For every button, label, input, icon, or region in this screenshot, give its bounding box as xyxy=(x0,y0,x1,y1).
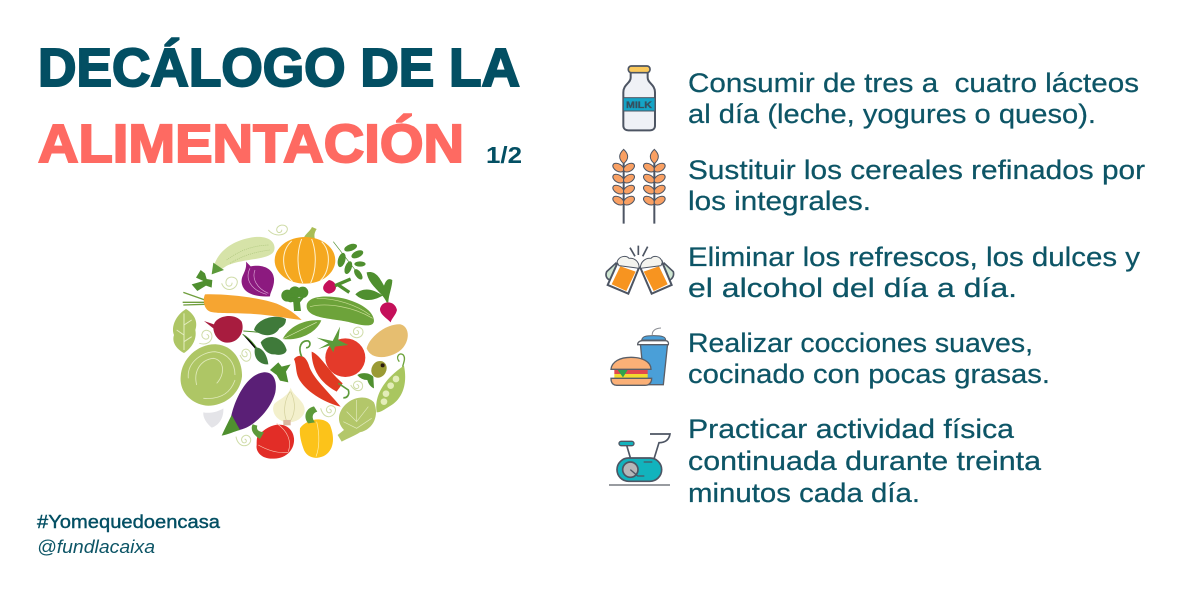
icon: burger and drink xyxy=(611,328,668,385)
cabbage xyxy=(181,344,242,406)
milk label: MILK xyxy=(626,100,652,110)
parsley left xyxy=(192,270,212,291)
radish sprig xyxy=(323,279,351,294)
radish right xyxy=(355,272,397,322)
zucchini xyxy=(212,237,275,274)
icon: beer mugs xyxy=(606,246,674,294)
text: cereals xyxy=(688,155,1145,216)
icon: milk bottle xyxy=(623,66,655,130)
potato xyxy=(367,324,408,357)
text: soft drinks xyxy=(688,242,1141,303)
text: exercise: continuada durante treinta xyxy=(688,446,1042,476)
title xyxy=(38,38,520,174)
title: DECÁLOGO DE LA xyxy=(38,38,520,98)
text: soft drinks: el alcohol del día a día. xyxy=(688,273,1017,303)
parsley centre xyxy=(270,362,291,382)
artichoke xyxy=(338,398,376,442)
text: soft drinks: Eliminar los refrescos, los dulces y xyxy=(688,242,1141,272)
text: dairy xyxy=(688,68,1139,129)
garlic bulb xyxy=(273,388,305,425)
pumpkin xyxy=(275,227,335,284)
text: cereals: Sustituir los cereales refinados por xyxy=(688,155,1145,185)
text: cooking: cocinado con pocas grasas. xyxy=(688,359,1050,389)
text: cereals: los integrales. xyxy=(688,186,871,216)
olive xyxy=(357,358,390,388)
handle: @fundlacaixa xyxy=(37,537,155,557)
beetroot xyxy=(204,316,287,364)
herb top right xyxy=(333,242,366,281)
cucumber xyxy=(307,296,374,325)
text: exercise: Practicar actividad física xyxy=(688,414,1015,444)
title: ALIMENTACIÓN xyxy=(38,114,464,174)
yellow pepper xyxy=(300,406,333,458)
eggplant xyxy=(222,372,276,436)
text: cooking xyxy=(688,328,1050,389)
tomato xyxy=(317,327,365,377)
hashtag: #Yomequedoencasa xyxy=(37,511,221,532)
lettuce leaf xyxy=(173,309,196,353)
text: exercise: minutos cada día. xyxy=(688,478,920,508)
illustration: circle of vegetables xyxy=(173,225,408,459)
page number: 1/2 xyxy=(486,142,522,168)
text: dairy: Consumir de tres a cuatro lácteos xyxy=(688,68,1139,98)
swirls xyxy=(199,225,363,446)
icon: wheat xyxy=(611,149,667,224)
text: exercise xyxy=(688,414,1042,508)
broccoli xyxy=(281,286,308,311)
icon: exercise bike xyxy=(609,434,670,485)
text: cooking: Realizar cocciones suaves, xyxy=(688,328,1033,358)
red pepper xyxy=(252,423,294,459)
garlic clove xyxy=(203,408,223,428)
text: dairy: al día (leche, yogures o queso). xyxy=(688,99,1096,129)
pea pod xyxy=(376,354,405,412)
spinach leaf xyxy=(283,320,321,339)
carrot xyxy=(183,292,302,320)
chilli peppers xyxy=(294,341,349,407)
onion xyxy=(242,262,274,296)
